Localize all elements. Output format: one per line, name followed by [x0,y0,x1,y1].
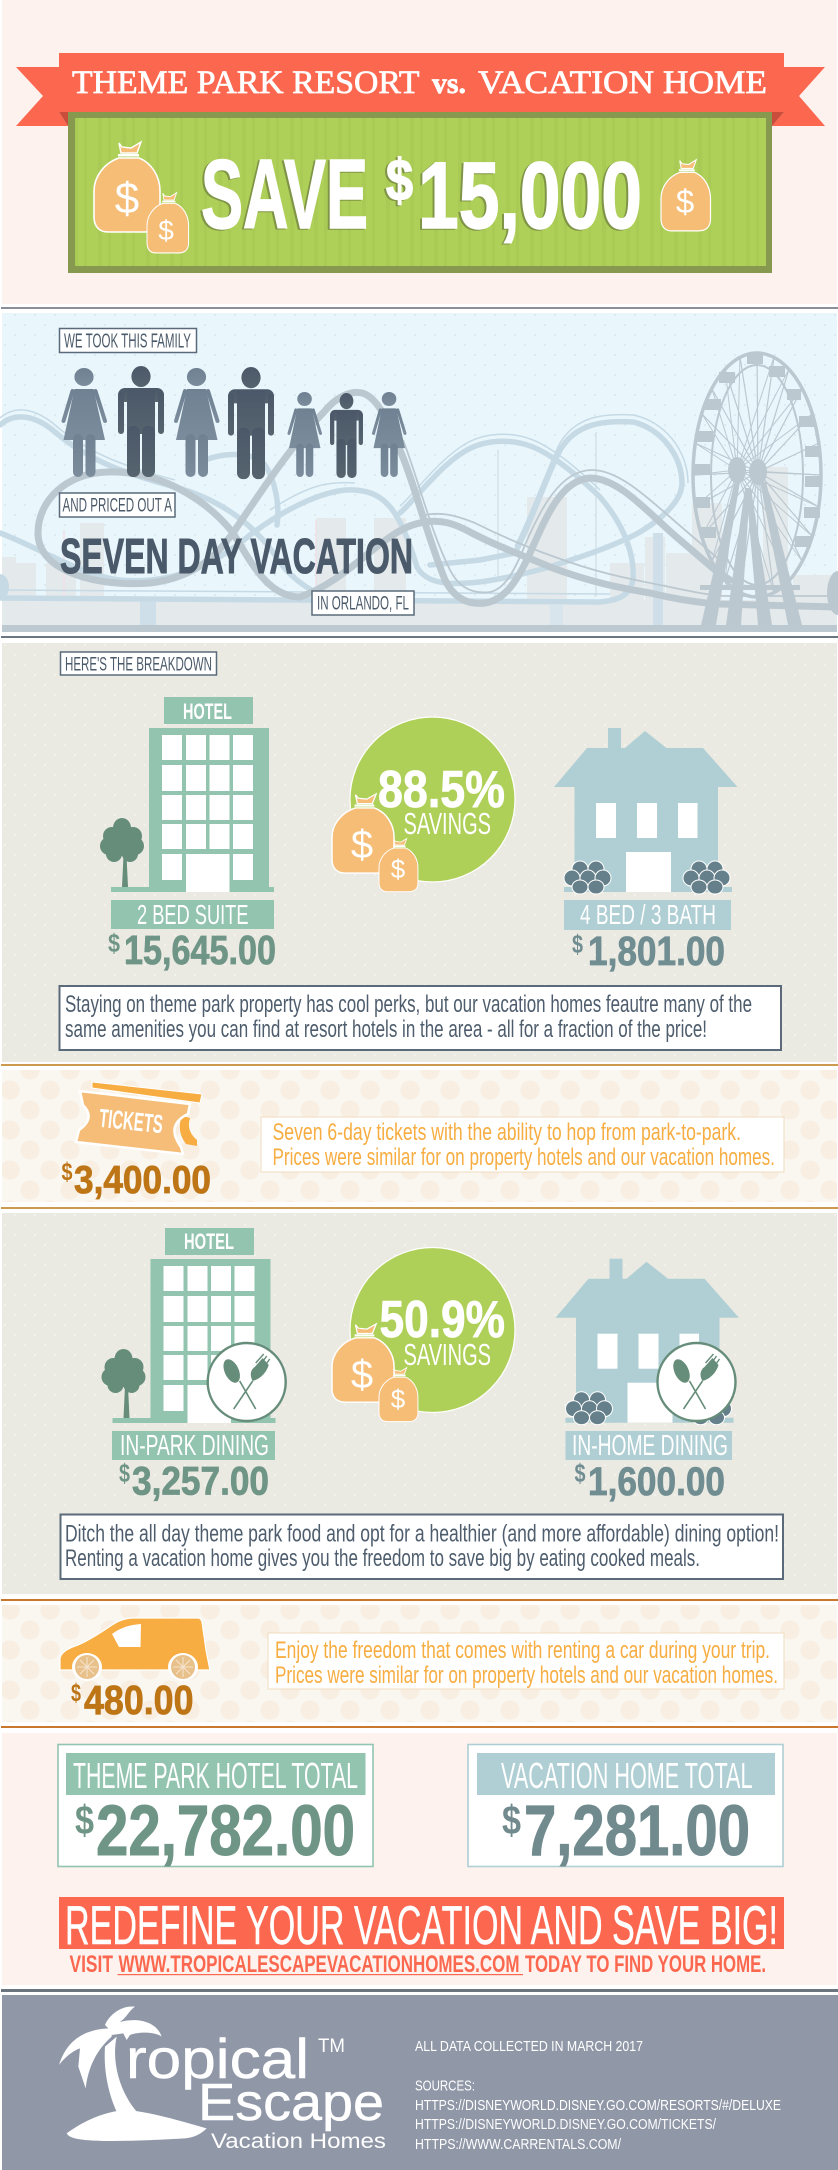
panel: footer [2,1995,838,2170]
home option: in-home dining price: 1,600.00 [588,1460,725,1504]
savings badge 50.9% [332,1248,515,1422]
savings panel [68,112,772,273]
panel: family and theme park scene [0,313,838,632]
label: in orlando: IN ORLANDO, FL [317,594,409,614]
savings badge 88.5%: SAVINGS [404,806,491,841]
text block: dining note [60,1514,783,1579]
icon: palm tree island [59,2006,207,2141]
hotel option: 2 bed suite price: 2 BED SUITE [137,899,248,930]
icon: money bag right [661,160,710,231]
visit website line: WWW.TROPICALESCAPEVACATIONHOMES.COM [118,1951,520,1978]
heading: seven day vacation: SEVEN DAY VACATION [60,530,413,584]
icon: ticket [76,1082,202,1154]
home option: in-home dining price: $ [574,1458,586,1488]
savings badge 50.9%: SAVINGS [404,1337,491,1372]
icon: money bags left: $ [158,215,174,246]
home option: 4 bed 3 bath price [564,899,731,974]
text block: sources: HTTPS://DISNEYWORLD.DISNEY.GO.COM/TICKETS/ [415,2116,717,2133]
text block: sources: ALL DATA COLLECTED IN MARCH 2017 [415,2038,643,2055]
savings badge 50.9%: $ [391,1384,406,1414]
panel: tickets [2,1070,837,1202]
icon: money bag right: $ [676,183,694,220]
savings badge 50.9%: $ [351,1353,373,1397]
label: and priced out a [60,493,175,517]
icon: family of seven [64,366,405,479]
home option: 4 bed 3 bath price: 4 BED / 3 BATH [580,899,716,930]
home option: in-home dining price: IN-HOME DINING [572,1430,728,1462]
visit website line: VISIT [70,1951,113,1978]
total: vacation home: $ [502,1797,521,1843]
icon: vacation home with bushes [554,728,738,894]
hotel label [165,1228,254,1255]
panel: car rental [2,1605,837,1723]
label: in orlando [312,591,414,615]
label: here's the breakdown: HERE'S THE BREAKDOWN [65,654,212,676]
icon: money bags left [94,142,189,253]
savings badge 88.5% [332,717,515,892]
text block: car note [268,1633,784,1689]
home option: 4 bed 3 bath price: $ [572,929,583,959]
total: theme park hotel: 22,782.00 [96,1792,355,1871]
icon: hotel with plate [102,1259,286,1423]
total: vacation home [468,1744,783,1871]
title: VACATION HOME [478,65,767,101]
logo: tropical escape: ropical [126,2027,309,2090]
title: THEME PARK RESORT [72,65,420,101]
hotel option: 2 bed suite price [108,899,276,973]
logo: tropical escape: Vacation Homes [211,2130,386,2153]
ribbon banner [16,53,825,126]
savings badge 88.5%: 88.5% [378,761,505,819]
price: car: 480.00 [84,1677,194,1723]
panel: lodging breakdown [2,643,837,1062]
title [72,65,767,101]
hotel option: in-park dining price: $ [119,1458,130,1488]
headline: save amount: $ [386,148,413,213]
logo: tropical escape: Escape [198,2074,384,2132]
title: vs. [432,67,466,100]
headline: save amount [201,139,642,249]
icon: hotel building with tree [100,728,274,892]
panel: totals and call to action [2,1733,837,1985]
text block: lodging note [60,986,781,1050]
home option: 4 bed 3 bath price: 1,801.00 [588,928,725,974]
savings badge 88.5%: $ [351,823,373,867]
price: car: $ [71,1679,81,1707]
hotel option: 2 bed suite price: 15,645.00 [124,927,276,973]
label: we took this family [60,328,196,352]
text block: sources: HTTPS://WWW.CARRENTALS.COM/ [415,2136,622,2153]
icon: money bags left: $ [115,174,139,223]
savings badge 50.9%: 50.9% [380,1291,505,1349]
hotel label: HOTEL [184,1229,234,1254]
headline: save amount: SAVE [201,139,368,249]
text block: tickets note [261,1117,784,1172]
skyline and roller coaster background [0,392,838,627]
hotel option: in-park dining price: 3,257.00 [132,1460,269,1504]
hotel option: 2 bed suite price: $ [108,928,120,958]
total: theme park hotel: $ [75,1797,94,1843]
panel: dining breakdown [2,1213,837,1594]
icon: car [60,1618,210,1681]
label: and priced out a: AND PRICED OUT A [62,496,172,516]
total: theme park hotel: THEME PARK HOTEL TOTAL [73,1755,358,1796]
icon: ticket: TICKETS [98,1103,164,1139]
price: tickets: $ [62,1158,73,1186]
panel: header [2,0,837,304]
total: vacation home: 7,281.00 [524,1792,750,1871]
price: tickets: 3,400.00 [74,1159,211,1202]
hotel label [164,697,253,724]
ferris wheel [693,353,821,625]
logo: tropical escape [59,2006,386,2153]
hotel option: in-park dining price: IN-PARK DINING [120,1430,269,1462]
icon: home with plate [556,1259,739,1425]
text block: sources [415,2038,781,2153]
text block: sources: SOURCES: [415,2078,475,2094]
label: we took this family: WE TOOK THIS FAMILY [64,330,191,352]
logo: tropical escape: TM [318,2036,345,2057]
label: here's the breakdown [60,652,216,676]
headline: save amount: 15,000 [418,143,642,249]
total: theme park hotel [58,1744,373,1871]
hotel label: HOTEL [183,699,232,724]
savings badge 88.5%: $ [391,854,406,884]
hotel option: in-park dining price [112,1430,275,1504]
home option: in-home dining price [566,1430,732,1504]
